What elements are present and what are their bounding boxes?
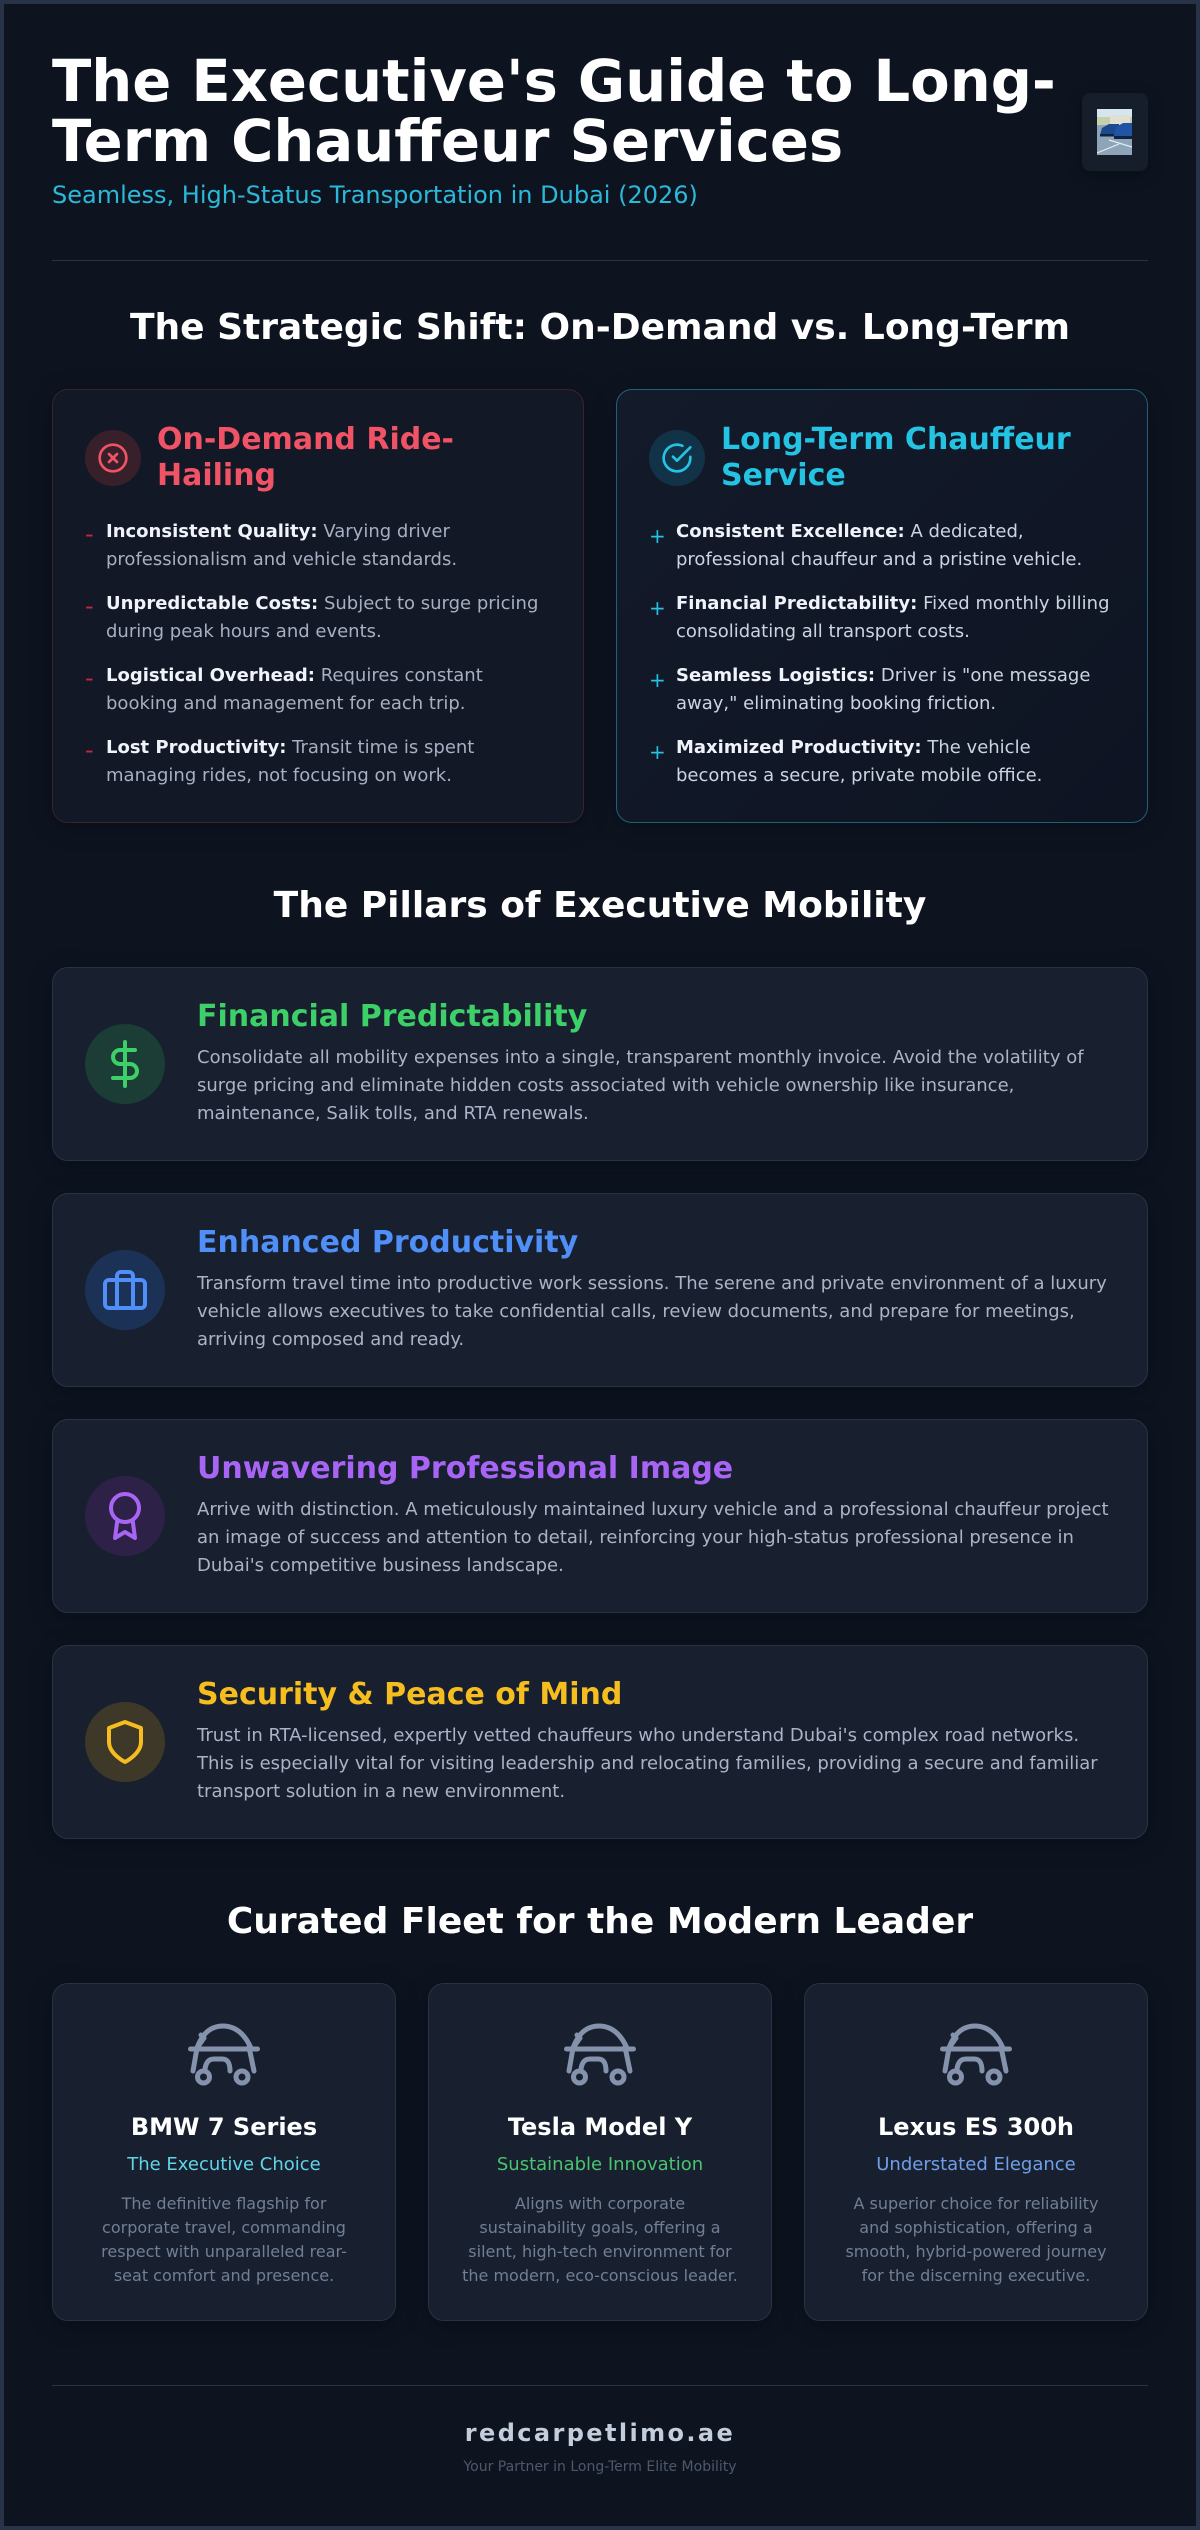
list item: consistent excellence (649, 521, 1082, 570)
list item: consistent excellence: Consistent Excellence: A dedicated, (676, 521, 1024, 542)
car name: BMW 7 Series (131, 2113, 317, 2141)
car description (845, 2194, 1107, 2285)
heading: long-term: Service (721, 458, 846, 493)
panel: long-term chauffeur service: + (649, 740, 666, 764)
body text: transport solution in a new environment. (197, 1781, 565, 1802)
icon: shield (85, 1702, 165, 1782)
list item: lost productivity: Lost Productivity: Transit time is spent (106, 737, 474, 758)
car description: the modern, eco-conscious leader. (462, 2266, 738, 2285)
icon: car (564, 2024, 636, 2086)
heading: strategic shift: The Strategic Shift: On-Demand vs. Long-Term (130, 307, 1070, 348)
list item: seamless logistics: Seamless Logistics: Driver is "one message (676, 665, 1090, 686)
panel: long-term chauffeur service: + (649, 524, 666, 548)
body text: Dubai's competitive business landscape. (197, 1555, 564, 1576)
list item: consistent excellence: professional chauffeur and a pristine vehicle. (676, 549, 1082, 570)
car name: Lexus ES 300h (878, 2113, 1074, 2141)
list item: seamless logistics: away," eliminating booking friction. (676, 693, 996, 714)
heading: on-demand: Hailing (157, 458, 276, 493)
list item: financial predictability: consolidating all transport costs. (676, 621, 970, 642)
car description: A superior choice for reliability (854, 2194, 1098, 2213)
body text: Trust in RTA-licensed, expertly vetted chauffeurs who understand Dubai's complex road networks. (197, 1725, 1079, 1746)
body text: arriving composed and ready. (197, 1329, 464, 1350)
car tagline: The Executive Choice (127, 2154, 321, 2175)
list item: inconsistent quality: professionalism and vehicle standards. (106, 549, 457, 570)
title (52, 48, 1056, 175)
body text: an image of success and attention to detail, reinforcing your high-status professional presence in (197, 1527, 1074, 1548)
list item: unpredictable costs: during peak hours and events. (106, 621, 382, 642)
list item: inconsistent quality: Inconsistent Quality: Varying driver (106, 521, 450, 542)
body text: maintenance, Salik tolls, and RTA renewals. (197, 1103, 589, 1124)
footer brand: redcarpetlimo.ae (465, 2419, 735, 2447)
body text: This is especially vital for visiting leadership and relocating families, providing a secure and familiar (197, 1753, 1098, 1774)
icon: check circle (649, 430, 705, 486)
panel: enhanced productivity (52, 1193, 1148, 1387)
car description: The definitive flagship for (122, 2194, 326, 2213)
car description: seat comfort and presence. (114, 2266, 334, 2285)
panel: on-demand ride-hailing (52, 389, 584, 823)
footer divider (52, 2385, 1148, 2386)
body text: surge pricing and eliminate hidden costs associated with vehicle ownership like insurance, (197, 1075, 1014, 1096)
car description: corporate travel, commanding (102, 2218, 346, 2237)
car description: sustainability goals, offering a (479, 2218, 721, 2237)
list item: maximized productivity: becomes a secure, private mobile office. (676, 765, 1042, 786)
footer tagline: Your Partner in Long-Term Elite Mobility (463, 2459, 737, 2475)
icon: briefcase (85, 1250, 165, 1330)
panel: BMW 7 Series (52, 1983, 396, 2321)
panel: long-term chauffeur service: + (649, 596, 666, 620)
car description (462, 2194, 738, 2285)
icon: award (85, 1476, 165, 1556)
heading: long-term (721, 422, 1071, 493)
car description: smooth, hybrid-powered journey (845, 2242, 1107, 2261)
body text (196, 1725, 1098, 1802)
list item: financial predictability (649, 593, 1110, 642)
list item: maximized productivity (649, 737, 1042, 786)
car tagline: Understated Elegance (876, 2154, 1076, 2175)
list item: logistical overhead: Logistical Overhead: Requires constant (106, 665, 483, 686)
car description: for the discerning executive. (862, 2266, 1090, 2285)
panel: on-demand ride-hailing: - (85, 736, 94, 764)
car description: Aligns with corporate (515, 2194, 685, 2213)
list item: financial predictability: Financial Predictability: Fixed monthly billing (676, 593, 1110, 614)
panel: Lexus ES 300h (804, 1983, 1148, 2321)
heading: Security & Peace of Mind (197, 1677, 622, 1712)
list item: lost productivity (85, 736, 474, 786)
body text: Consolidate all mobility expenses into a single, transparent monthly invoice. Avoid the volatility of (197, 1047, 1084, 1068)
list item: unpredictable costs (85, 592, 538, 642)
body text: Arrive with distinction. A meticulously maintained luxury vehicle and a professional chauffeur project (197, 1499, 1109, 1520)
logo thumbnail (1082, 93, 1148, 171)
panel: financial predictability (52, 967, 1148, 1161)
list item: maximized productivity: Maximized Productivity: The vehicle (676, 737, 1031, 758)
body text (197, 1499, 1109, 1576)
list item: seamless logistics (649, 665, 1090, 714)
heading: Financial Predictability (197, 999, 587, 1034)
car description: silent, high-tech environment for (468, 2242, 732, 2261)
car description: and sophistication, offering a (859, 2218, 1093, 2237)
car description: respect with unparalleled rear- (101, 2242, 347, 2261)
header divider (52, 260, 1148, 261)
body text (196, 1273, 1107, 1350)
panel: on-demand ride-hailing: - (85, 520, 94, 548)
body text: vehicle allows executives to take confidential calls, review documents, and prepare for meetings, (197, 1301, 1075, 1322)
list item: unpredictable costs: Unpredictable Costs: Subject to surge pricing (106, 593, 538, 614)
car name: Tesla Model Y (508, 2113, 692, 2141)
heading: Unwavering Professional Image (197, 1451, 733, 1486)
panel: professional image (52, 1419, 1148, 1613)
list item: logistical overhead (85, 664, 483, 714)
panel: on-demand ride-hailing: - (85, 664, 94, 692)
body text (197, 1047, 1084, 1124)
subtitle: Seamless, High-Status Transportation in Dubai (2026) (52, 181, 698, 209)
icon: dollar (85, 1024, 165, 1104)
heading: on-demand: On-Demand Ride- (157, 422, 454, 457)
list item: inconsistent quality (85, 520, 457, 570)
heading: fleet: Curated Fleet for the Modern Leader (227, 1901, 973, 1942)
title: Term Chauffeur Services (52, 108, 843, 175)
icon: car (940, 2024, 1012, 2086)
panel: security (52, 1645, 1148, 1839)
heading: on-demand (157, 422, 454, 493)
panel: Tesla Model Y (428, 1983, 772, 2321)
heading: pillars: The Pillars of Executive Mobility (274, 885, 926, 926)
car tagline: Sustainable Innovation (497, 2154, 703, 2175)
icon: x circle (85, 430, 141, 486)
heading: long-term: Long-Term Chauffeur (721, 422, 1071, 457)
list item: logistical overhead: booking and management for each trip. (106, 693, 466, 714)
car description (101, 2194, 347, 2285)
panel: long-term chauffeur service (616, 389, 1148, 823)
list item: lost productivity: managing rides, not focusing on work. (106, 765, 452, 786)
title: The Executive's Guide to Long- (52, 48, 1056, 115)
panel: long-term chauffeur service: + (649, 668, 666, 692)
panel: on-demand ride-hailing: - (85, 592, 94, 620)
body text: Transform travel time into productive work sessions. The serene and private environment of a luxury (197, 1273, 1107, 1294)
icon: car (188, 2024, 260, 2086)
heading: Enhanced Productivity (197, 1225, 578, 1260)
